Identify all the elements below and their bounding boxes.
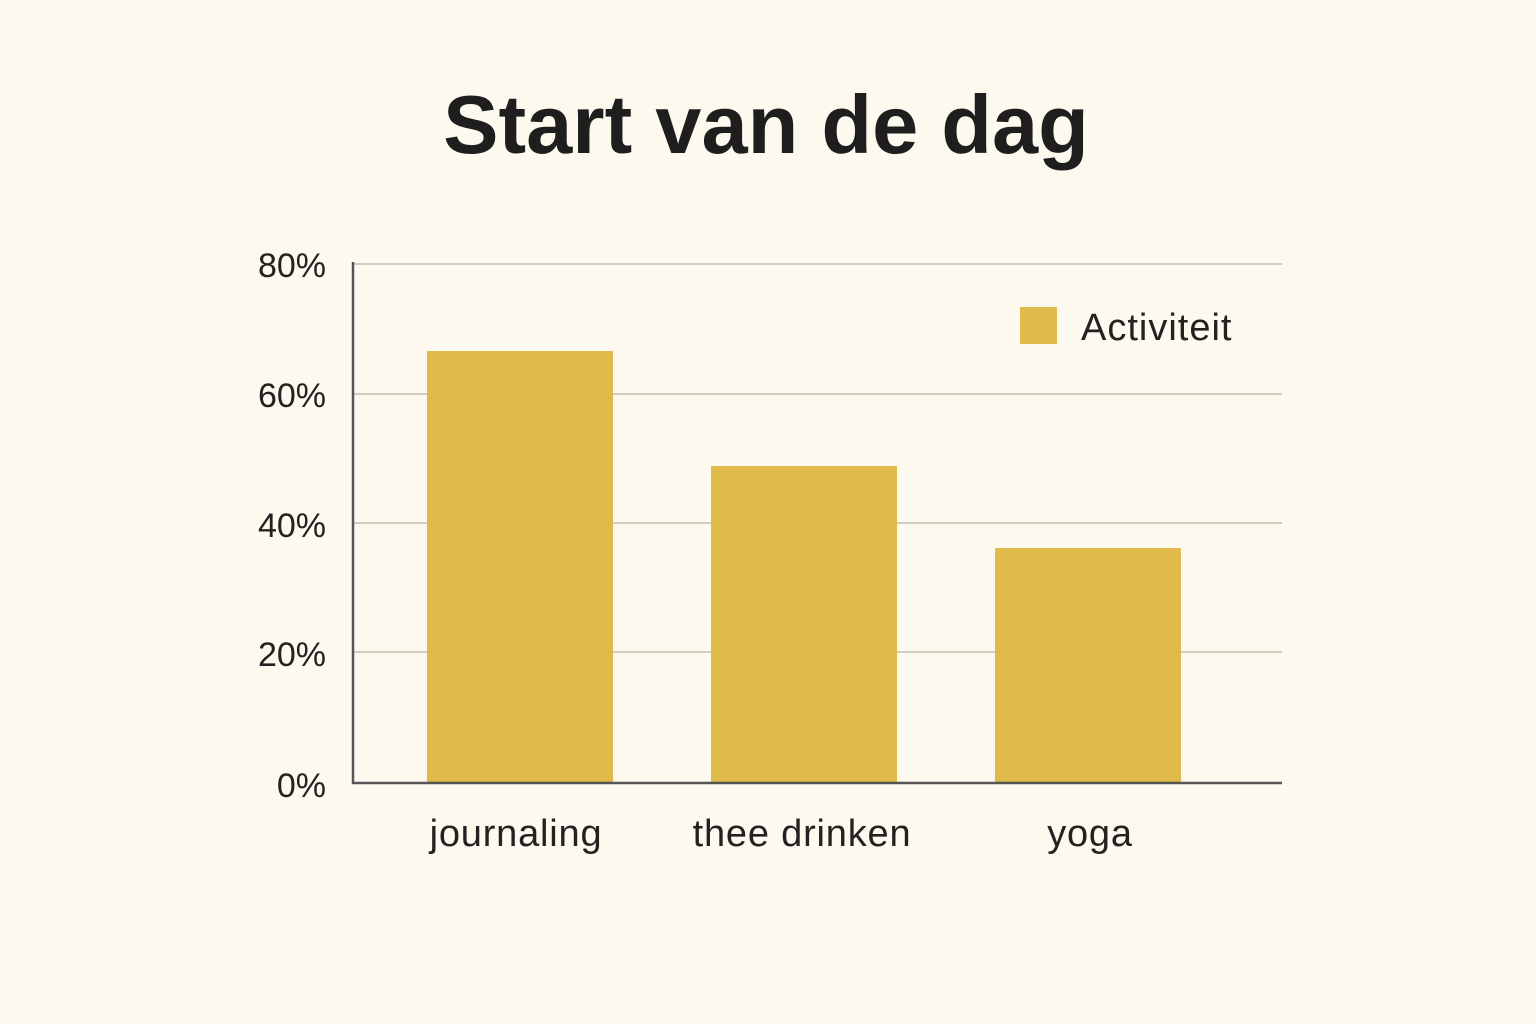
x-axis labels	[429, 813, 1133, 855]
y-axis labels: 40%	[258, 507, 326, 545]
x-axis labels: thee drinken	[693, 813, 911, 855]
y-axis labels: 20%	[258, 636, 326, 674]
axes	[352, 262, 1282, 784]
bars	[427, 351, 1181, 783]
y-axis labels: 60%	[258, 377, 326, 415]
title: Start van de dag	[443, 78, 1089, 171]
x-axis labels: yoga	[1047, 813, 1133, 855]
y-axis labels	[258, 247, 326, 805]
legend: Activiteit	[1081, 307, 1232, 349]
y-axis labels: 80%	[258, 247, 326, 285]
x-axis labels: journaling	[429, 813, 602, 855]
y-axis labels: 0%	[277, 767, 326, 805]
bar chart	[258, 247, 1282, 855]
